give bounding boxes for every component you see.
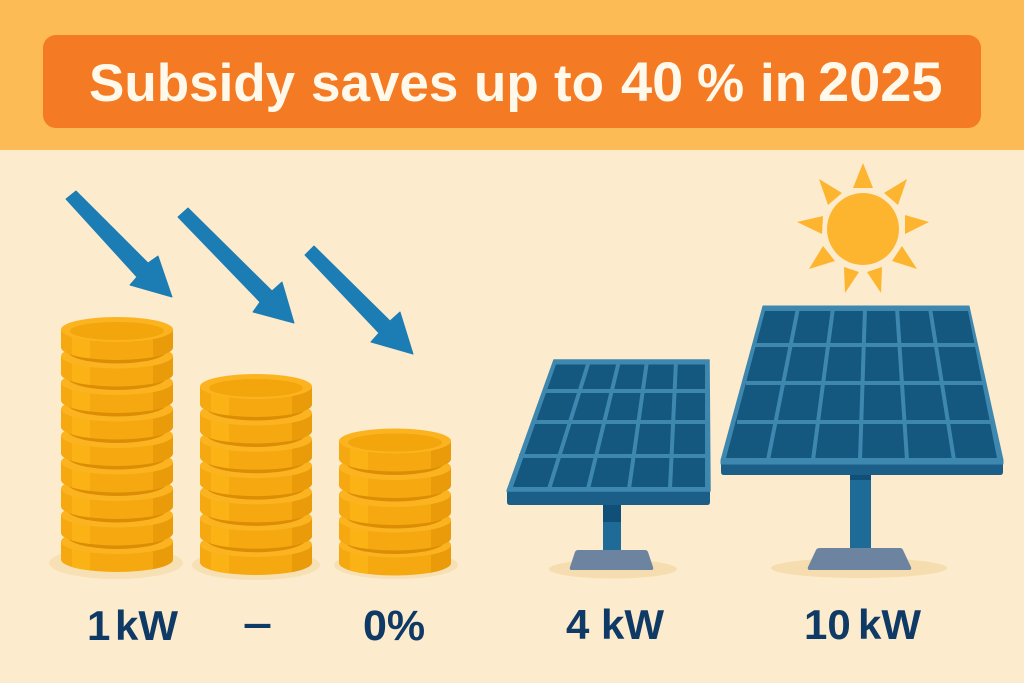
- title banner: [43, 35, 981, 128]
- small solar panel: [507, 360, 710, 578]
- title: up: [474, 54, 539, 113]
- label: 10 kW: kW: [858, 601, 921, 648]
- sun: [797, 163, 929, 293]
- label: 4 kW: 4: [566, 601, 590, 648]
- title: 2025: [818, 50, 943, 113]
- title: 40: [621, 50, 683, 113]
- label: 1 kW: kW: [115, 602, 178, 649]
- label: 0%: 0%: [363, 602, 425, 650]
- large solar panel: [721, 306, 1003, 578]
- label: 10 kW: 10: [804, 601, 851, 648]
- coin stack 2: [192, 374, 320, 580]
- header band: [0, 0, 1024, 150]
- arrow 2: [178, 208, 294, 323]
- label: dash: –: [243, 599, 272, 646]
- label: 4 kW: kW: [601, 601, 664, 648]
- title: in: [760, 54, 807, 113]
- arrow 1: [66, 191, 172, 297]
- title: Subsidy: [89, 54, 296, 113]
- title: saves: [311, 54, 458, 113]
- label: 1 kW: 1: [87, 602, 110, 649]
- coin stack 1: [49, 317, 183, 579]
- title: %: [697, 54, 744, 113]
- coin stack 3: [334, 428, 458, 579]
- arrow 3: [305, 246, 413, 354]
- title: to: [554, 54, 604, 113]
